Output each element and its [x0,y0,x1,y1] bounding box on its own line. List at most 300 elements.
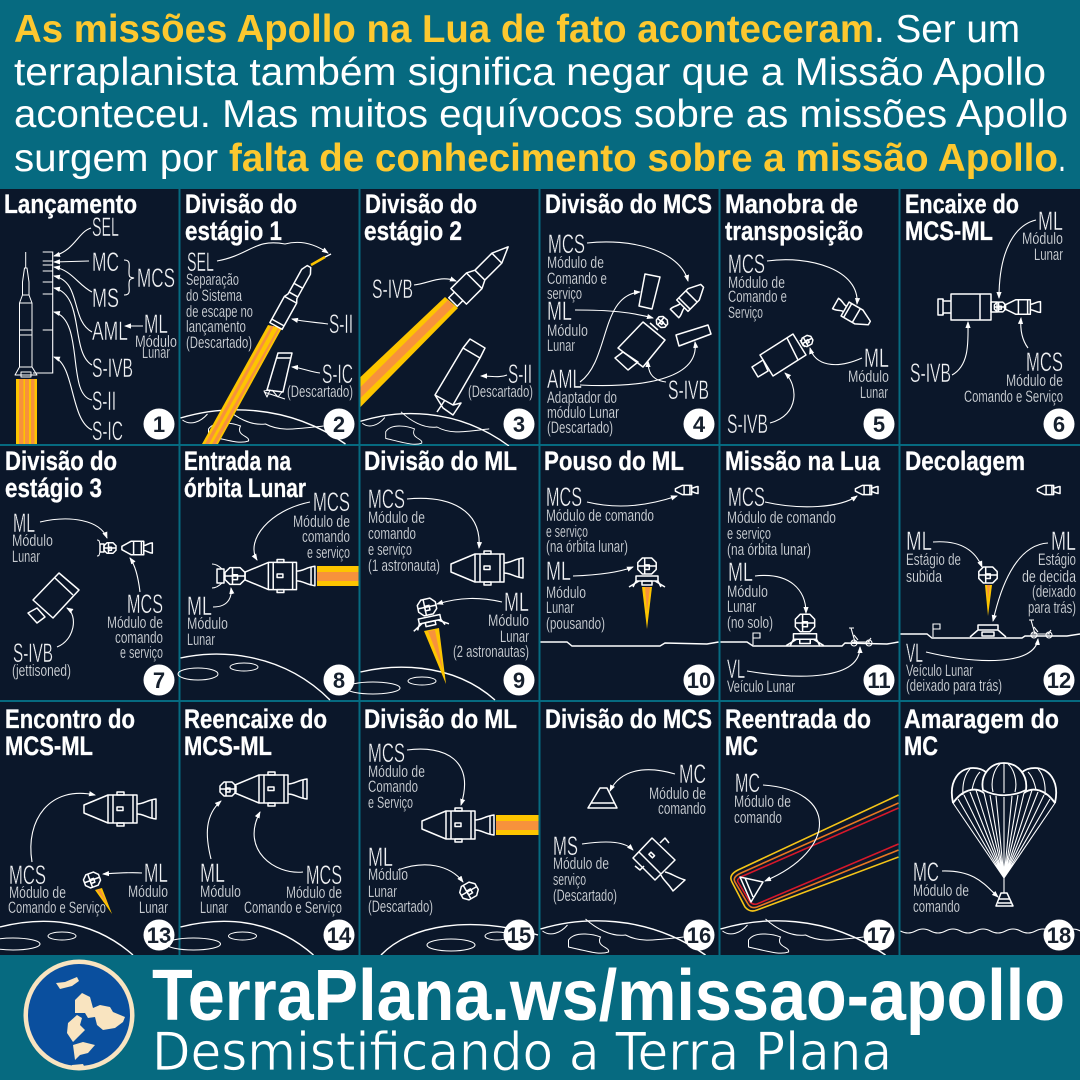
labels [553,759,706,905]
flame [985,585,992,616]
heading: MCS-ML [5,731,93,761]
panel 3: divisão do estágio 2 [360,189,538,446]
heading [364,189,477,246]
labels: (Descartado) [186,333,252,352]
number 18 [1044,920,1074,950]
labels: (jettisoned) [12,661,71,680]
labels: serviço [547,284,582,303]
heading: MC [725,731,758,761]
heading: MCS-ML [184,731,272,761]
heading: estágio 1 [185,216,282,246]
LM [408,595,449,631]
labels: MCS [137,263,175,293]
arrows [213,502,310,607]
small CSM [675,485,698,495]
header text [14,8,1068,180]
panel 11: missão na lua [720,446,898,700]
labels: Lunar [1034,245,1063,264]
S-IC stage [264,353,292,399]
labels: Módulo [135,332,177,351]
labels: (Descartado) [287,382,353,401]
number 6: 6 [1053,412,1065,437]
panel 10: pouso do ML [540,446,718,700]
labels: ML [144,858,168,888]
labels: S-IVB [92,353,133,383]
heading [725,189,863,246]
labels: Módulo [187,614,228,633]
number 10: 10 [687,668,711,693]
labels: VL [906,638,923,668]
labels: MCS [728,482,765,512]
moon [166,921,314,955]
arrows [40,519,140,647]
labels: Módulo [547,321,588,340]
heading: Decolagem [905,446,1025,476]
arrows [31,793,142,874]
labels: comando [913,897,960,916]
panel 2: divisão do estágio 1 [180,189,358,444]
number 13 [144,920,174,950]
labels: ML [547,296,572,326]
labels [547,229,709,437]
labels: SEL [187,247,214,277]
labels: Comando e [728,287,787,306]
heading [185,189,297,246]
heading: Entrada na [184,446,292,476]
labels: S-II [92,386,116,416]
rocket [15,252,37,377]
number 1 [144,408,174,440]
LM [786,614,824,646]
number 17: 17 [867,923,891,948]
labels: comando [734,808,782,827]
arrows [398,749,465,882]
flame [496,815,538,835]
panel 5: manobra de transposição [720,189,898,444]
labels: MS [553,831,578,861]
CSM [669,280,708,319]
panel 14: reencaixe do MCS-ML [166,702,358,955]
labels: Módulo de [547,253,604,272]
labels: ML [200,858,225,888]
number 3: 3 [513,412,525,437]
heading [904,704,1059,761]
labels: MC [92,247,119,277]
labels: e serviço [546,522,588,541]
heading: Divisão do MCS [545,189,712,219]
arrows [952,220,1036,375]
labels: comando [302,527,350,546]
command module [740,877,763,902]
CSM [84,792,156,826]
flame [424,628,446,684]
LM [629,558,665,587]
labels: MCS [368,484,405,514]
small CSM [855,485,878,495]
heading [5,446,117,503]
labels: (2 astronautas) [453,642,529,661]
labels: comando [368,524,416,543]
number 14 [324,920,354,950]
arrows [207,801,303,872]
labels: serviço [553,870,586,889]
heading: Reentrada do [725,704,871,734]
panel 16: divisão do MCS [540,702,718,955]
labels: MCS [546,482,582,512]
flame [16,379,37,444]
arrows [407,498,502,604]
labels: (Descartado) [553,886,617,905]
panel 9: divisão do ML [346,446,538,700]
flame [317,566,358,586]
small CSM [1037,485,1060,495]
labels [12,508,163,680]
earth [360,412,509,446]
header text: falta de conhecimento sobre a missão Apollo [229,137,1058,180]
labels: Módulo [488,611,529,630]
labels: S-IC [92,416,123,446]
labels: ML [187,591,212,621]
labels: AML [547,364,582,394]
labels: módulo Lunar [547,403,619,422]
labels: Veículo Lunar [906,661,973,680]
number 7 [144,664,174,696]
labels: ML [864,343,889,373]
labels: ML [546,556,571,586]
labels: Serviço [728,303,763,322]
panel 8: entrada na órbita lunar [178,446,358,700]
CSM [422,808,494,842]
heading [5,704,135,761]
labels: Módulo [368,865,408,884]
moon [0,921,133,955]
labels [734,768,791,827]
labels: ML [144,309,168,339]
labels: AML [92,316,128,346]
labels: MCS [368,738,405,768]
descent stage [970,625,1006,637]
heading: Encontro do [5,704,135,734]
number 2 [324,408,354,440]
flame [642,587,652,629]
labels: ML [13,508,35,538]
heading: Reencaixe do [184,704,327,734]
number 7: 7 [153,668,165,693]
flame [95,888,112,914]
scale bracket [33,252,53,373]
labels [372,274,533,401]
CSM [832,297,873,330]
panel 6: encaixe do MCS-ML [900,189,1080,444]
header text: . Ser um [874,8,1020,51]
labels: Comando e Serviço [8,898,106,917]
number 6 [1044,408,1074,440]
labels: Módulo de [913,881,969,900]
arrows [54,228,143,430]
labels: (Descartado) [468,382,533,401]
panel 1: lançamento [0,189,178,446]
labels: S-IVB [13,638,53,668]
CSM with LM [212,560,315,592]
flame [202,325,282,444]
re-entry streaks [731,795,898,911]
panel 17: reentrada do MC [720,702,898,955]
labels: Lunar [200,898,228,917]
labels: S-IVB [668,375,709,405]
number 1: 1 [153,412,165,437]
labels: (deixado para trás) [906,676,1002,695]
labels [92,212,177,446]
labels [200,858,342,917]
arrows [747,496,860,676]
number 14: 14 [327,923,352,948]
labels: Módulo de comando [546,506,654,525]
number 8 [324,664,354,696]
labels: ML [368,842,393,872]
labels: Lunar [546,598,574,617]
labels: MCS [313,487,350,517]
labels: S-IVB [910,358,951,388]
labels: (Descartado) [368,897,433,916]
panel 12: decolagem [900,446,1080,700]
heading: Divisão do [185,189,297,219]
rocket [445,239,516,310]
LM [82,871,102,889]
brace [124,260,134,295]
earth [720,919,886,955]
labels: comando [658,799,706,818]
labels: (1 astronauta) [368,556,440,575]
number 16: 16 [687,923,711,948]
labels: Lunar [139,898,168,917]
number 12 [1044,664,1074,696]
labels: Módulo [546,583,586,602]
arrows [217,242,328,373]
labels [910,206,1063,406]
labels: (na órbita lunar) [546,537,628,556]
flame [360,297,458,407]
labels [727,482,836,696]
labels: subida [906,567,942,586]
heading: Divisão do [365,189,477,219]
heading: Divisão do ML [364,704,517,734]
moon [346,667,495,700]
arrows [414,279,507,377]
heading: Encaixe do [905,189,1019,219]
service module [633,838,685,891]
number 11 [864,664,894,696]
heading: Missão na Lua [725,446,881,476]
S-IVB with LM [752,334,814,377]
arrows [926,542,1048,661]
arrows [767,260,862,423]
heading: estágio 3 [5,473,102,503]
labels: MCS [548,229,585,259]
labels: MCS [306,860,342,890]
heading [184,446,306,503]
flag [753,633,760,645]
rover [1029,620,1052,638]
labels: Comando e Serviço [244,898,342,917]
labels: lançamento [186,317,246,336]
labels: MS [92,283,119,313]
number 5: 5 [873,412,885,437]
labels: S-IVB [727,409,768,439]
labels: MCS [728,249,765,279]
labels: Módulo de [553,854,609,873]
number 9 [504,664,534,696]
icon: flat earth globe [24,960,134,1070]
labels: ML [1038,206,1063,236]
heading [725,704,871,761]
docked stack [938,294,1040,320]
labels [906,526,1076,695]
labels: Módulo de [286,883,342,902]
labels: Lunar [12,547,40,566]
labels: S-II [508,359,532,389]
labels: Lunar [727,597,756,616]
S-IVB with LM [615,315,669,370]
header text: . [1058,137,1066,180]
labels: Módulo de [9,883,66,902]
number 5 [864,408,894,440]
labels: e Serviço [368,793,413,812]
labels: e serviço [307,543,350,562]
labels: Lunar [187,630,215,649]
command module [588,788,617,808]
labels: (pousando) [546,614,605,633]
labels: Lunar [500,627,529,646]
number 4 [684,408,714,440]
labels: de escape no [186,302,253,321]
header text: aconteceu. Mas muitos equívocos sobre as missões Apollo [14,93,1068,136]
labels [546,482,654,633]
heading: Manobra de [725,189,858,219]
moon [178,654,330,700]
labels: S-IVB [372,274,413,304]
labels: Módulo de [368,508,425,527]
header text: surgem por [14,137,218,180]
flag [933,624,940,637]
heading: Pouso do ML [544,446,684,476]
number 11: 11 [867,668,891,693]
arrow [942,871,998,897]
labels: S-II [329,309,353,339]
labels: ML [906,526,932,556]
heading [184,704,327,761]
heading: MC [904,731,938,761]
labels [8,858,168,917]
labels: MC [913,857,939,887]
lunar ground [900,634,1080,638]
labels: VL [727,654,745,684]
labels: Lunar [547,336,575,355]
labels: MC [679,759,706,789]
rover [849,628,872,646]
labels: Módulo de [293,512,350,531]
footer band [0,955,1080,1080]
labels [368,738,433,916]
labels: e serviço [727,524,771,543]
labels: ML [504,587,529,617]
heading: Lançamento [4,189,137,219]
labels: Módulo [727,582,768,601]
labels: Módulo de [649,784,706,803]
number 16 [684,920,714,950]
labels [727,249,889,439]
labels: MCS [127,589,163,619]
labels: Comando e [547,269,607,288]
labels: e serviço [120,643,163,662]
ascent stage [979,567,997,583]
labels: Separação [186,270,239,289]
number 10 [684,664,714,696]
heading: Divisão do [5,446,117,476]
heading: Divisão do ML [364,446,517,476]
CSM [451,551,523,585]
adapter panels [639,274,711,346]
labels: comando [115,628,163,647]
header text: As missões Apollo na Lua de fato aconteceram [14,8,874,51]
labels: Módulo de [107,613,163,632]
labels: Módulo [128,882,168,901]
command module [996,893,1013,906]
heading: MCS-ML [905,216,993,246]
moon [381,925,538,955]
earth [180,408,346,444]
arrows [575,242,695,386]
number 17 [864,920,894,950]
labels: Adaptador do [547,388,617,407]
labels: S-IC [322,359,353,389]
labels: MCS [9,860,46,890]
labels: Módulo [200,882,241,901]
labels: Lunar [368,882,397,901]
LM ascent stage [458,880,480,902]
panel 15: divisão do ML [360,702,538,955]
labels: Módulo [848,367,889,386]
labels [368,484,529,661]
header text: terraplanista também significa negar que a Missão Apollo [14,51,1046,94]
number 15: 15 [507,923,531,948]
labels: Módulo [12,531,53,550]
panel 4: divisão do MCS [540,189,718,444]
labels: Veículo Lunar [727,677,795,696]
panel 13: encontro do MCS-ML [0,702,178,955]
waves [900,929,1080,933]
labels: Módulo de [734,792,791,811]
earth [540,919,706,955]
escape tower [311,254,331,265]
labels: SEL [92,212,119,242]
panel 18: amaragem do MC [900,702,1080,955]
labels: Módulo de [728,273,785,292]
number 3 [504,408,534,440]
lunar ground [540,642,718,646]
number 12: 12 [1047,668,1071,693]
number 9: 9 [513,668,525,693]
heading: Divisão do MCS [545,704,712,734]
heading: estágio 2 [364,216,462,246]
lunar ground [720,642,898,646]
labels: (no solo) [727,613,773,632]
number 13: 13 [147,923,171,948]
CSM and LM [97,540,152,556]
labels: Lunar [860,383,888,402]
number 8: 8 [333,668,345,693]
parachutes [952,763,1056,893]
number 18: 18 [1047,923,1071,948]
